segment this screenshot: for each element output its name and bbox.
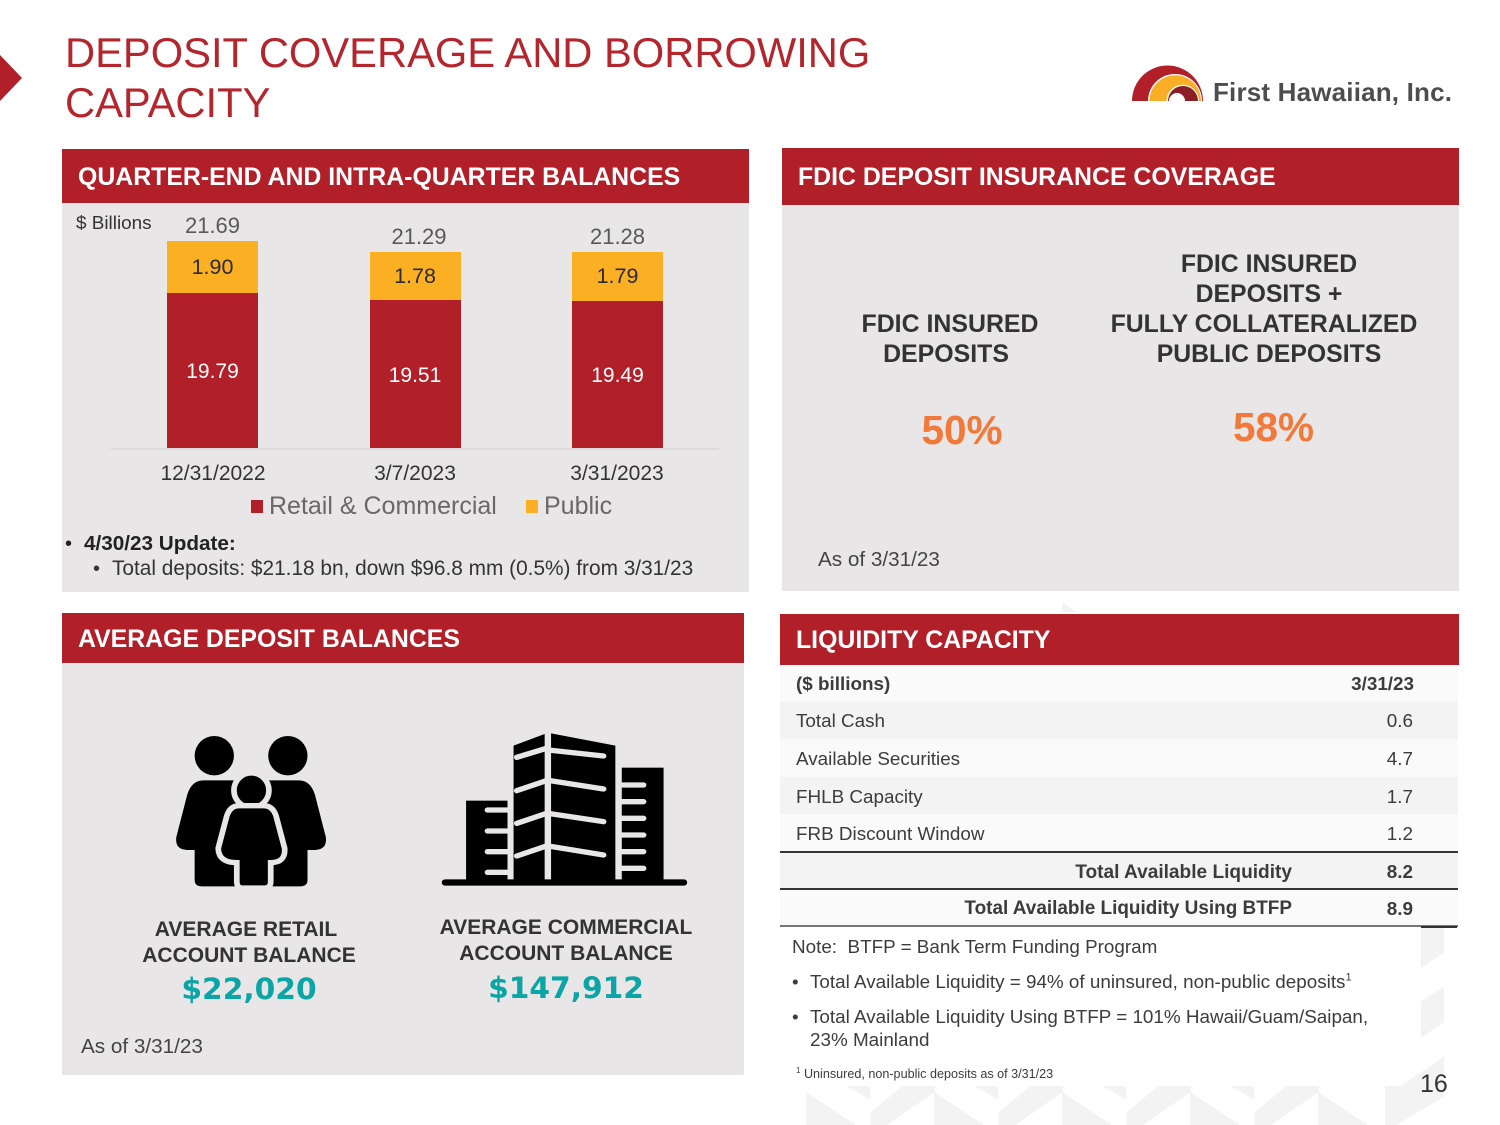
label: insured plus collateralized	[1111, 251, 1417, 368]
legend	[251, 492, 612, 520]
heading: quarter-end balances	[62, 149, 749, 203]
retail label: AVERAGE RETAIL	[155, 918, 337, 941]
notes: •	[792, 1006, 799, 1027]
notes: •	[792, 971, 799, 992]
table row: total cash	[780, 702, 1458, 739]
table row: FHLB capacity	[780, 777, 1458, 814]
icons: family and buildings	[176, 733, 688, 886]
panel: quarter-end and intra-quarter balances	[62, 149, 749, 592]
notes: Note: BTFP = Bank Term Funding Program	[792, 936, 1157, 957]
stacked bar chart: deposits: 21.29	[391, 224, 447, 249]
notes: Total Available Liquidity = 94% of uninsured, non-public deposits1	[810, 971, 1352, 992]
table row: total available liquidity	[780, 851, 1458, 888]
label: FDIC insured deposits: DEPOSITS	[883, 340, 1009, 368]
axis label: 3/7/2023	[374, 462, 456, 485]
bar: 3/7/2023	[370, 224, 461, 448]
heading: liquidity capacity: LIQUIDITY CAPACITY	[796, 627, 1050, 654]
table row: total using BTFP	[780, 888, 1458, 927]
retail value: $22,020	[181, 972, 317, 1007]
table row: header: 3/31/23	[1351, 673, 1414, 694]
label: insured plus collateralized: PUBLIC DEPOSITS	[1157, 341, 1381, 368]
title: CAPACITY	[65, 79, 270, 126]
heading: liquidity capacity	[780, 614, 1459, 665]
bar: 12/31/2022: 1.90	[192, 255, 233, 279]
heading: average deposit balances	[62, 613, 744, 663]
table row: available securities: 4.7	[1387, 748, 1413, 769]
footnote: 1 Uninsured, non-public deposits as of 3/31/23	[796, 1066, 1053, 1081]
label: insured plus collateralized: FDIC INSURED	[1181, 251, 1357, 278]
notes: Total Available Liquidity Using BTFP = 101% Hawaii/Guam/Saipan,	[810, 1006, 1368, 1027]
update note: •	[65, 533, 72, 555]
table row: header: ($ billions)	[796, 673, 890, 694]
notes	[792, 936, 1368, 1050]
page number: 16	[1420, 1070, 1448, 1098]
label: insured plus collateralized: FULLY COLLATERALIZED	[1111, 311, 1417, 338]
icon: office buildings	[442, 733, 687, 886]
table row: FRB discount window: FRB Discount Window	[796, 823, 984, 844]
table row: total cash: 0.6	[1387, 710, 1413, 731]
table row: FRB discount window: 1.2	[1387, 823, 1413, 844]
bar: 12/31/2022	[167, 213, 258, 448]
table row: total available liquidity: 8.2	[1387, 861, 1413, 882]
retail label: ACCOUNT BALANCE	[142, 944, 356, 966]
table row: available securities	[780, 739, 1458, 777]
table row: total using BTFP: Total Available Liquidity Using BTFP	[964, 898, 1292, 919]
section marker arrow	[0, 55, 22, 101]
heading: FDIC coverage	[782, 148, 1459, 205]
title: DEPOSIT COVERAGE AND BORROWING	[65, 29, 870, 76]
update note	[65, 532, 693, 580]
table row: FRB discount window	[780, 814, 1458, 851]
bar: 3/31/2023: 19.49	[591, 364, 644, 387]
notes: 23% Mainland	[810, 1029, 929, 1050]
heading: FDIC coverage: FDIC DEPOSIT INSURANCE COVERAGE	[798, 164, 1276, 191]
panel: liquidity capacity	[780, 614, 1459, 1081]
bar: 3/7/2023: 19.51	[389, 364, 441, 387]
as-of note: As of 3/31/23	[818, 548, 940, 571]
update note: •	[93, 558, 100, 580]
update note: 4/30/23 Update:	[84, 532, 236, 555]
heading: quarter-end balances: QUARTER-END AND INTRA-QUARTER BALANCES	[78, 164, 680, 191]
retail label	[142, 918, 356, 966]
logo	[1132, 66, 1452, 107]
stacked bar chart: deposits: 21.28	[590, 224, 645, 249]
stacked bar chart: deposits: 21.69	[185, 213, 240, 238]
table row: total available liquidity: Total Available Liquidity	[1075, 862, 1292, 883]
heading: average deposit balances: AVERAGE DEPOSIT BALANCES	[78, 626, 460, 653]
table row: FHLB capacity: FHLB Capacity	[796, 786, 923, 807]
bar: 3/31/2023: 1.79	[597, 264, 638, 288]
commercial label	[440, 916, 692, 964]
table row: available securities: Available Securities	[796, 748, 960, 769]
panel: average deposit balances	[62, 613, 744, 1075]
table row: total cash: Total Cash	[796, 710, 885, 731]
table: liquidity	[780, 673, 1458, 927]
as-of note: As of 3/31/23	[81, 1035, 203, 1058]
label: insured plus collateralized: DEPOSITS +	[1196, 281, 1342, 308]
table row: FHLB capacity: 1.7	[1387, 786, 1413, 807]
label: FDIC insured deposits: FDIC INSURED	[861, 310, 1038, 338]
label: FDIC insured deposits	[861, 310, 1038, 368]
icon: family	[176, 736, 326, 888]
legend: Public	[544, 492, 612, 520]
commercial label: ACCOUNT BALANCE	[459, 942, 673, 964]
legend: Retail & Commercial	[269, 492, 497, 520]
axis label: 12/31/2022	[160, 462, 266, 485]
title	[65, 29, 870, 126]
value: 58%: 58%	[1233, 404, 1314, 450]
table row: total using BTFP: 8.9	[1387, 898, 1413, 919]
bar: 3/7/2023: 1.78	[394, 264, 436, 288]
commercial label: AVERAGE COMMERCIAL	[440, 916, 692, 939]
axis line	[111, 448, 719, 450]
axis label: 3/31/2023	[570, 462, 664, 485]
update note: Total deposits: $21.18 bn, down $96.8 mm (0.5%) from 3/31/23	[112, 557, 693, 580]
logo: First Hawaiian, Inc.	[1213, 77, 1452, 107]
table row: header	[780, 665, 1458, 702]
stacked bar chart: deposits	[76, 213, 719, 485]
unit label: $ Billions	[76, 213, 152, 234]
value: 50%: 50%	[921, 407, 1003, 453]
panel: FDIC deposit insurance coverage	[782, 148, 1459, 591]
bar: 3/31/2023	[572, 224, 663, 448]
bar: 12/31/2022: 19.79	[186, 360, 239, 383]
commercial value: $147,912	[488, 971, 644, 1006]
